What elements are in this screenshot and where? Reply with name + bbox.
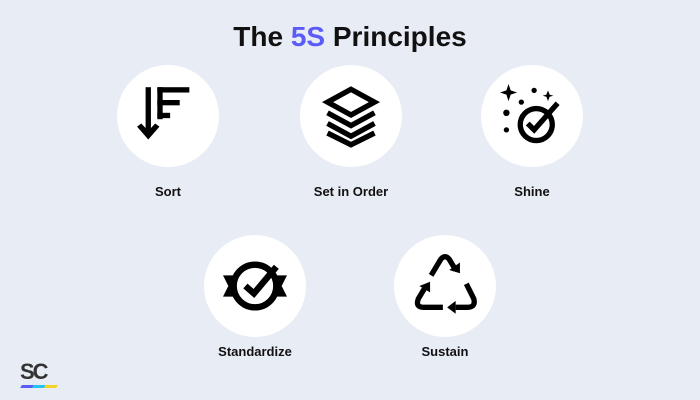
label: sort: Sort — [155, 184, 181, 199]
title: The 5S Principles — [233, 21, 467, 52]
icon: set in order — [300, 65, 402, 167]
icon: standardize — [204, 235, 306, 337]
label: shine: Shine — [514, 184, 550, 199]
label: sustain: Sustain — [422, 344, 468, 359]
icon: shine — [481, 65, 583, 167]
icon: sustain — [394, 235, 496, 337]
logo — [20, 359, 58, 388]
label: standardize: Standardize — [218, 344, 292, 359]
logo: SC — [20, 359, 47, 384]
icon: sort — [117, 65, 219, 167]
label: set in order: Set in Order — [314, 184, 388, 199]
